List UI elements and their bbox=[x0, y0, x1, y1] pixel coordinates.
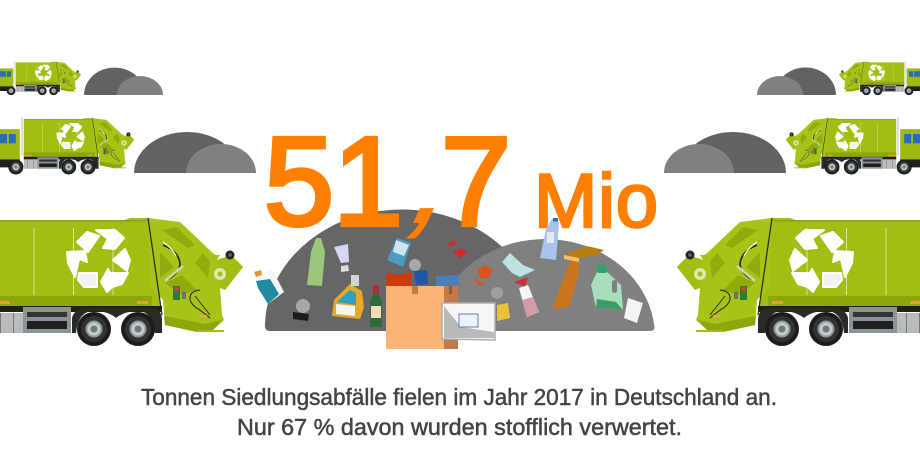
icon: blue bottle lying bbox=[436, 275, 459, 286]
icon: detergent bottle bbox=[254, 269, 284, 304]
headline number: , bbox=[396, 134, 475, 245]
caption: Tonnen Siedlungsabfälle fielen im Jahr 2017 in Deutschland an. bbox=[141, 384, 777, 410]
icon: blue can bbox=[409, 259, 428, 285]
headline number: 5 bbox=[264, 111, 334, 252]
headline number: 1 bbox=[333, 111, 403, 252]
caption: Nur 67 % davon wurden stofflich verwertet. bbox=[237, 414, 682, 440]
caption bbox=[141, 384, 777, 440]
icon: lid and yellow can bbox=[491, 287, 510, 321]
icon: green plastic bottle bbox=[307, 238, 325, 286]
central waste pile bbox=[265, 209, 654, 331]
icon: spray bottle bbox=[514, 277, 539, 317]
icon: snack pack bbox=[387, 238, 411, 267]
icon: red wrappers bbox=[448, 240, 467, 258]
icon: wine bottle bbox=[370, 285, 382, 327]
truck: middle left bbox=[0, 117, 134, 174]
truck: middle right bbox=[786, 117, 920, 174]
icon: yellow bottle bbox=[332, 275, 364, 319]
icon: plastic cup bbox=[624, 298, 643, 323]
icon: water bottle bbox=[540, 218, 559, 260]
truck: top left small bbox=[0, 61, 81, 95]
truck: top right small bbox=[839, 61, 920, 95]
pile: middle left bbox=[134, 132, 256, 173]
icon: carton bbox=[564, 246, 604, 262]
headline number bbox=[264, 111, 511, 252]
icon: tube bbox=[334, 244, 349, 272]
icon: brown bottle bbox=[552, 257, 579, 309]
waste items bbox=[254, 218, 643, 349]
headline number: 7 bbox=[441, 111, 511, 252]
icon: cardboard box bbox=[386, 286, 458, 349]
truck: bottom right large bbox=[677, 215, 920, 346]
icon: tin can left bbox=[293, 299, 310, 321]
icon: red crushed cup bbox=[386, 272, 411, 286]
icon: foil bbox=[502, 253, 535, 277]
pile: middle right bbox=[664, 132, 786, 173]
icon: wipes package bbox=[442, 303, 495, 340]
pile: top left small bbox=[84, 68, 163, 95]
truck: bottom left large bbox=[0, 215, 243, 346]
icon: orange can bbox=[473, 265, 493, 285]
icon: green detergent jug bbox=[591, 265, 623, 310]
headline unit: Mio bbox=[534, 159, 658, 244]
pile: top right small bbox=[757, 68, 836, 95]
